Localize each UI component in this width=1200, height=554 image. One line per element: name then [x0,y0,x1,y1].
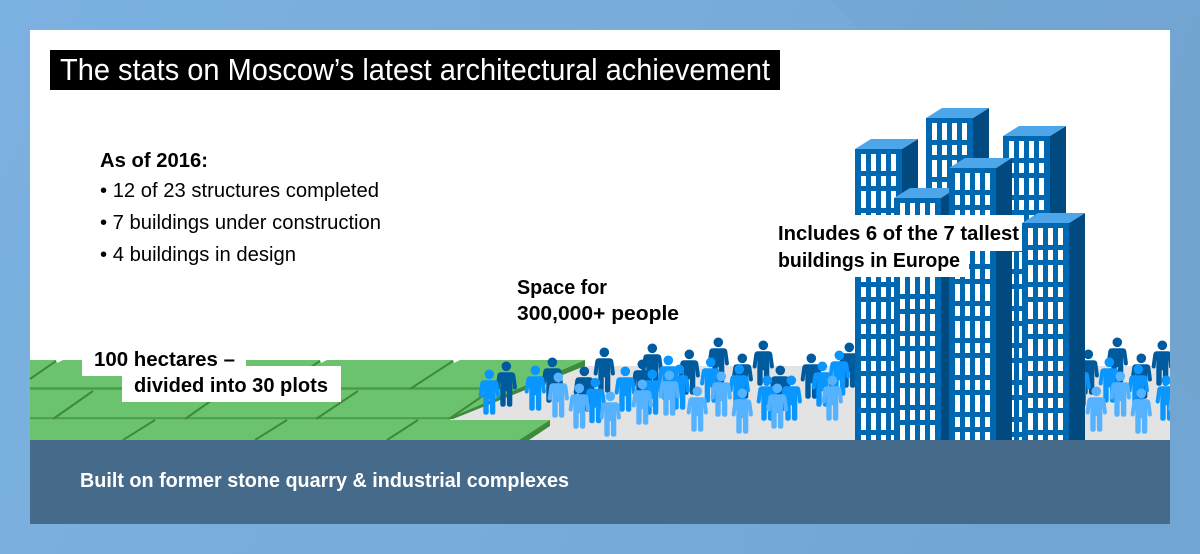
label: tallest buildings [770,215,1022,277]
text block: status as of 2016: • 4 buildings in design [100,244,296,266]
building: rear right [1003,126,1066,440]
text block: status as of 2016: • 12 of 23 structures completed [100,180,379,202]
ground: grey plaza [400,366,1170,440]
foundation band: Built on former stone quarry & industrial complexes [80,470,569,492]
building: front centre [949,158,1012,440]
people: mid blue [479,350,1177,423]
text block: status as of 2016 [100,150,381,266]
label: space for people: Space for [517,277,607,299]
skyscrapers [855,108,1085,440]
building: rear centre [926,108,989,440]
crowd of people [479,338,1190,437]
building: low centre [894,188,957,440]
text block: status as of 2016: • 7 buildings under construction [100,212,381,234]
green plots [30,360,585,440]
label: hectares and plots [82,345,341,402]
building: left [855,139,918,440]
people: dark blue [496,338,1173,412]
building: front right [1022,213,1085,440]
label: tallest buildings: buildings in Europe [778,250,960,272]
label: tallest buildings: Includes 6 of the 7 tallest [778,223,1019,245]
label: space for people [517,277,679,325]
label: hectares and plots: 100 hectares – [94,349,235,371]
text block: status as of 2016: As of 2016: [100,150,208,172]
people: light blue [548,370,1190,437]
title: The stats on Moscow’s latest architectural achievement [60,52,770,87]
foundation band [30,440,1170,524]
label: hectares and plots: divided into 30 plots [134,375,328,397]
label: space for people: 300,000+ people [517,303,679,325]
